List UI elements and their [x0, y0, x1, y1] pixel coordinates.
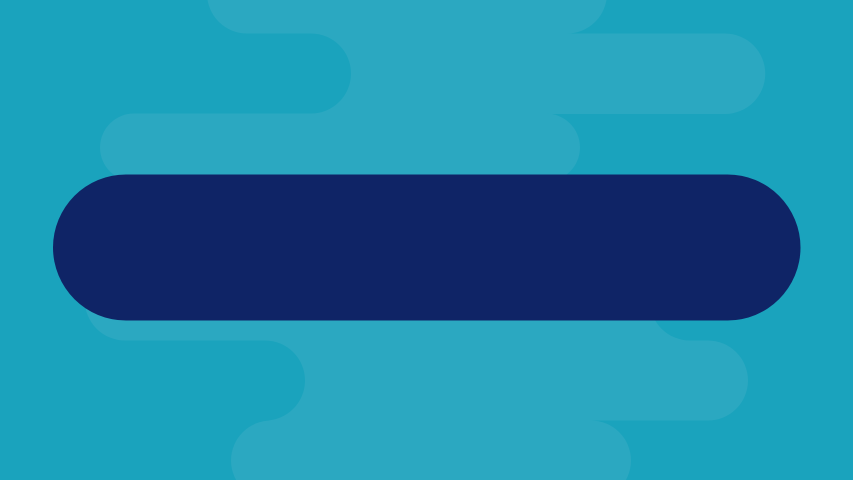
lower cloud band	[85, 260, 748, 480]
upper cloud notch	[0, 34, 351, 114]
lower cloud left notch	[0, 340, 305, 420]
navy banner	[53, 174, 800, 320]
lower cloud right notch	[650, 260, 853, 340]
upper cloud band	[100, 0, 765, 182]
